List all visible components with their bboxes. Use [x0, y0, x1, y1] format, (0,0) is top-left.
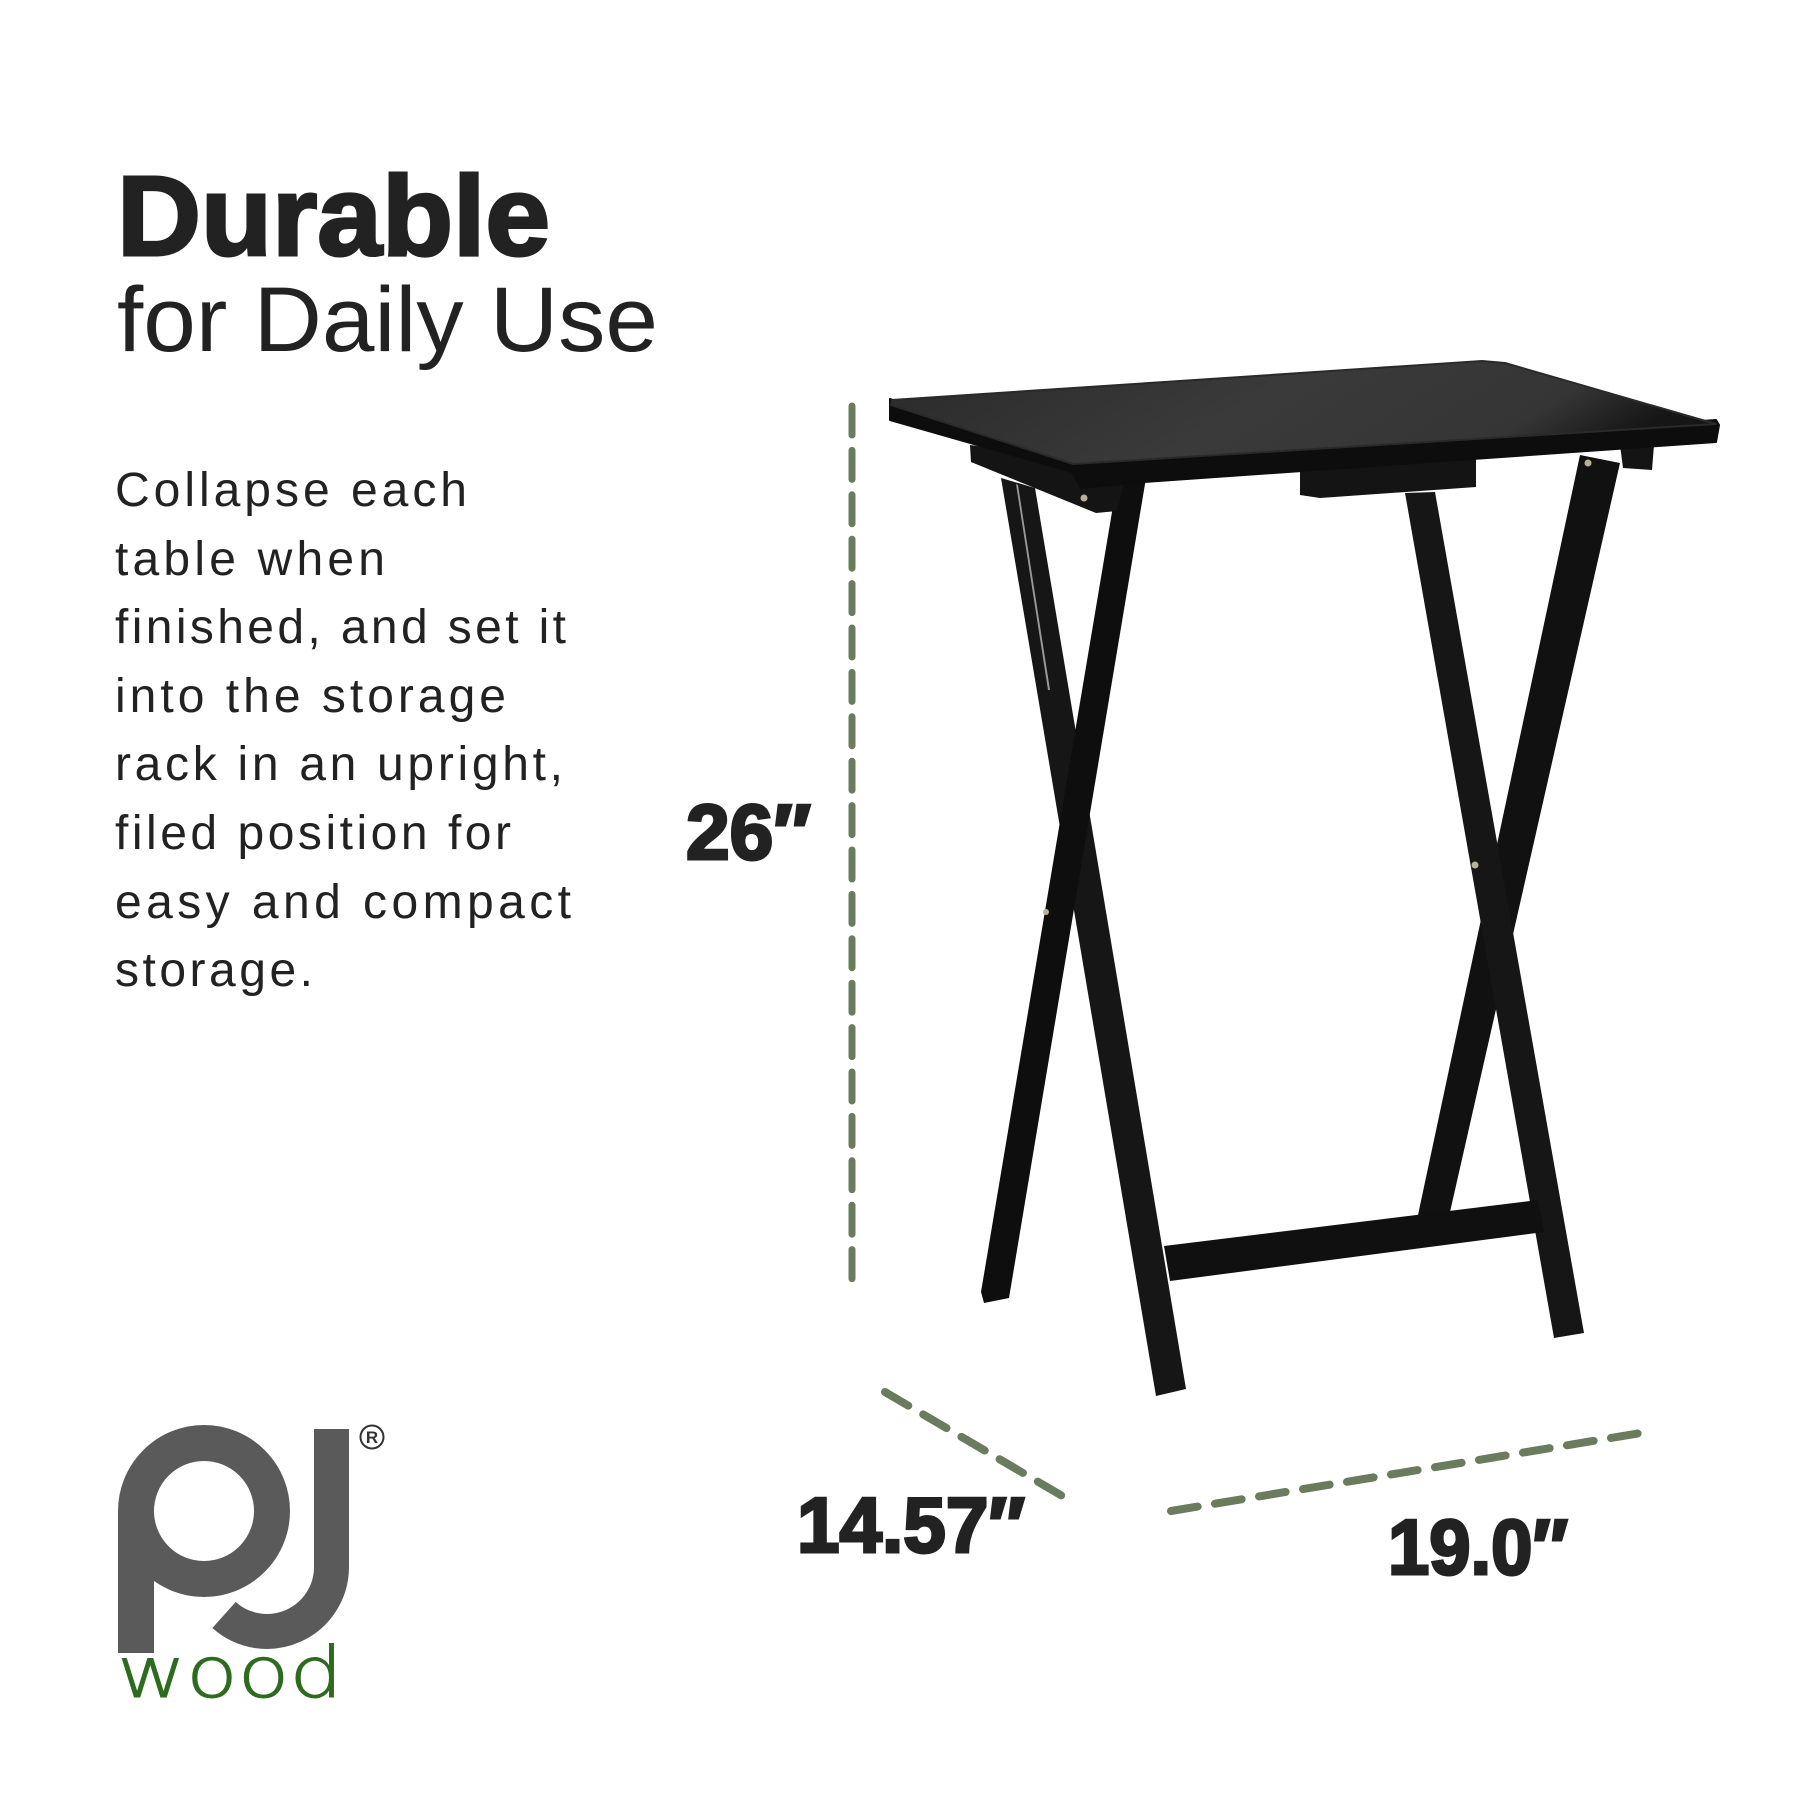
body text: rack in an upright,: [115, 738, 563, 791]
height label: 26″: [686, 788, 811, 876]
body text: [115, 464, 571, 997]
logo: [117, 1426, 384, 1714]
registered mark: [360, 1426, 384, 1448]
body text: easy and compact: [115, 876, 571, 929]
depth dimension line: [885, 1392, 1064, 1497]
depth label: 14.57″: [797, 1481, 1025, 1569]
title: Durable: [117, 153, 550, 279]
title: for Daily Use: [117, 269, 658, 371]
body text: table when: [115, 533, 385, 586]
crossbar: [1164, 1200, 1544, 1281]
body text: storage.: [115, 944, 313, 997]
logo wood: wood: [117, 1632, 343, 1714]
width dimension line: [1171, 1433, 1641, 1511]
body text: finished, and set it: [115, 601, 566, 654]
table edge: [890, 399, 1719, 488]
registered mark: R: [366, 1428, 378, 1447]
rivets: [1043, 460, 1592, 915]
body text: into the storage: [115, 670, 506, 723]
height dimension line: [848, 406, 856, 1283]
title: [117, 153, 658, 371]
width label: 19.0″: [1388, 1503, 1568, 1591]
table illustration: [890, 361, 1719, 1396]
body text: filed position for: [115, 807, 511, 860]
logo j: [224, 1429, 332, 1631]
logo p: [136, 1443, 272, 1653]
table top surface: [891, 361, 1716, 464]
apron blocks: [970, 445, 1654, 513]
body text: Collapse each: [115, 464, 467, 517]
back legs: [1001, 455, 1620, 1396]
front legs: [981, 478, 1584, 1338]
